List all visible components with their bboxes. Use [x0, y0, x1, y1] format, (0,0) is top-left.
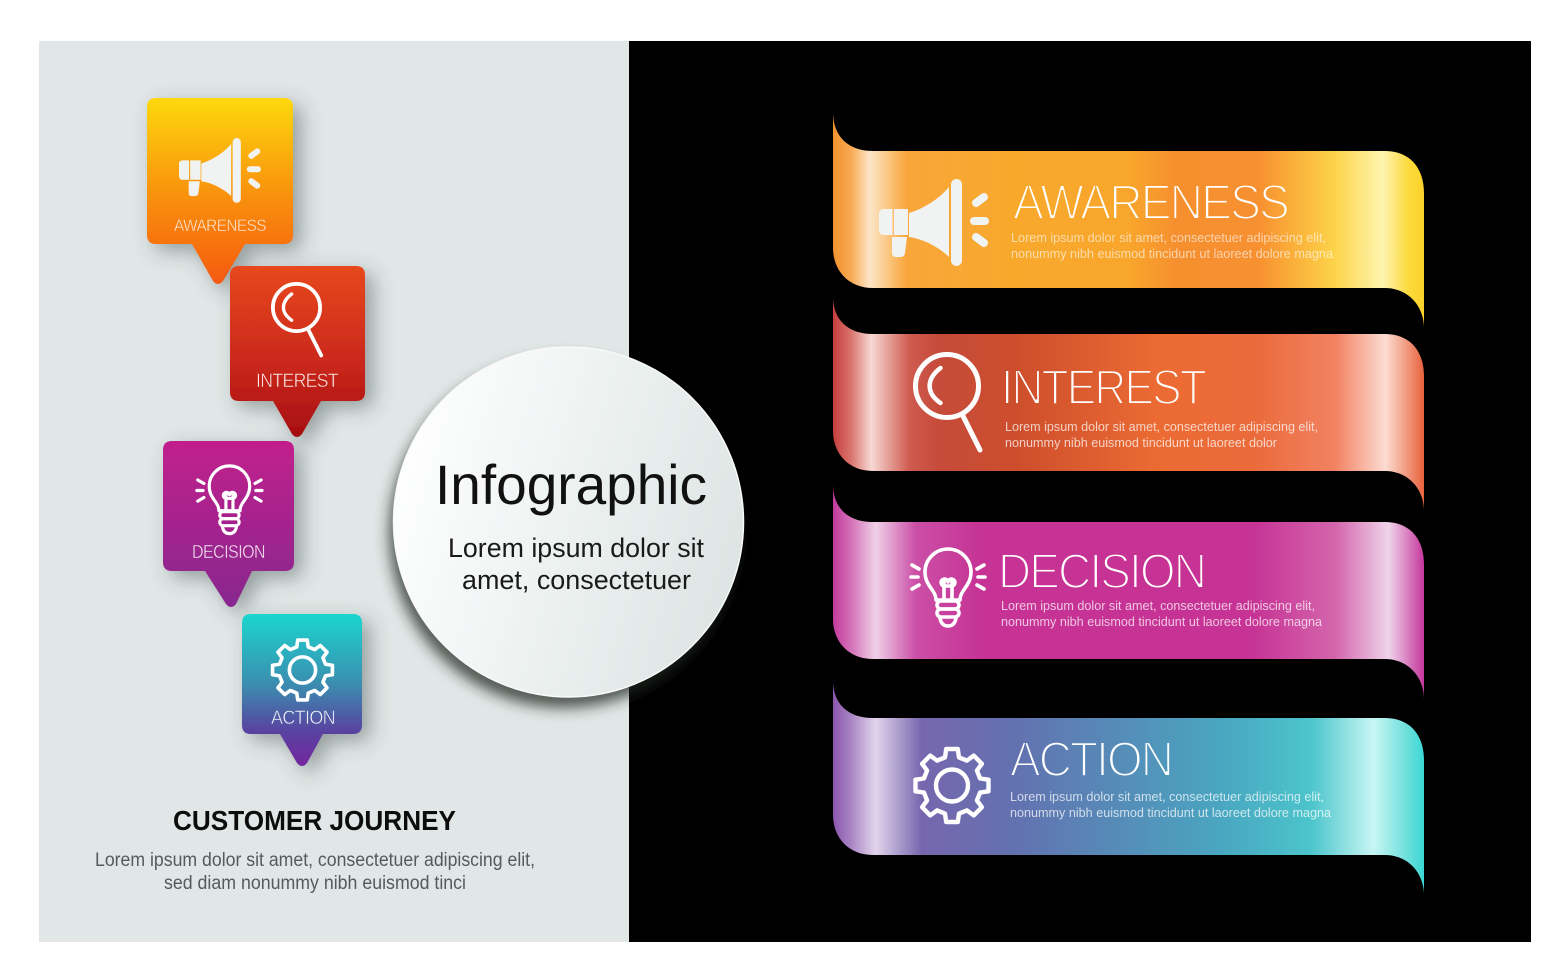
pin: decision: [163, 441, 294, 607]
pin label: decision: DECISION: [192, 542, 265, 562]
icon: light bulb small: [197, 466, 262, 534]
ribbon text: decision: [1001, 598, 1323, 629]
ribbon text: awareness: Lorem ipsum dolor sit amet, consectetuer adipiscing elit,: [1011, 230, 1326, 245]
icon: gear small: [273, 640, 332, 700]
ribbon text: interest: Lorem ipsum dolor sit amet, consectetuer adipiscing elit,: [1005, 419, 1318, 434]
panel: right black background: [629, 41, 1531, 942]
pin: interest: [230, 266, 365, 437]
icon: megaphone: [879, 179, 985, 266]
ribbon text: interest: nonummy nibh euismod tincidunt ut laoreet dolor: [1005, 435, 1278, 450]
text block: journey description: sed diam nonummy nibh euismod tinci: [164, 873, 466, 894]
center circle: [389, 347, 744, 708]
ribbon text: decision: Lorem ipsum dolor sit amet, consectetuer adipiscing elit,: [1001, 598, 1315, 613]
ribbon title: interest: INTEREST: [1001, 361, 1206, 415]
ribbon text: decision: nonummy nibh euismod tincidunt ut laoreet dolore magna: [1001, 614, 1323, 629]
heading: customer journey: CUSTOMER JOURNEY: [173, 805, 456, 836]
ribbon text: action: [1010, 789, 1332, 820]
ribbon text: awareness: [1011, 230, 1334, 261]
icon: light bulb: [911, 549, 985, 626]
icon: gear: [916, 749, 988, 822]
panel: left light background: [39, 41, 630, 942]
pin label: action: ACTION: [271, 707, 335, 729]
text block: journey description: Lorem ipsum dolor sit amet, consectetuer adipiscing elit,: [95, 850, 535, 871]
pin label: interest: INTEREST: [256, 370, 339, 392]
icon: megaphone small: [179, 138, 258, 203]
ribbon text: interest: [1005, 419, 1318, 450]
pin: awareness: [147, 98, 293, 284]
ribbon text: action: nonummy nibh euismod tincidunt ut laoreet dolore magna: [1010, 805, 1332, 820]
text block: journey description: [95, 850, 535, 894]
ribbon title: awareness: AWARENESS: [1013, 176, 1288, 230]
pin: action: [242, 614, 362, 766]
ribbon: decision: [833, 484, 1424, 699]
ribbon text: awareness: nonummy nibh euismod tincidunt ut laoreet dolore magna: [1011, 246, 1334, 261]
ribbon text: action: Lorem ipsum dolor sit amet, consectetuer adipiscing elit,: [1010, 789, 1324, 804]
text block: circle subtitle: [448, 533, 705, 595]
title: infographic: Infographic: [435, 453, 707, 516]
ribbon title: decision: DECISION: [998, 545, 1205, 599]
pin label: awareness: AWARENESS: [174, 216, 266, 235]
ribbon title: action: ACTION: [1010, 733, 1172, 787]
ribbon: awareness: [833, 112, 1424, 328]
ribbon: interest: [833, 296, 1424, 511]
ribbon: action: [833, 680, 1424, 895]
text block: circle subtitle: amet, consectetuer: [462, 565, 691, 595]
icon: magnifier small: [273, 284, 321, 356]
text block: circle subtitle: Lorem ipsum dolor sit: [448, 533, 705, 563]
icon: magnifier: [916, 354, 980, 450]
